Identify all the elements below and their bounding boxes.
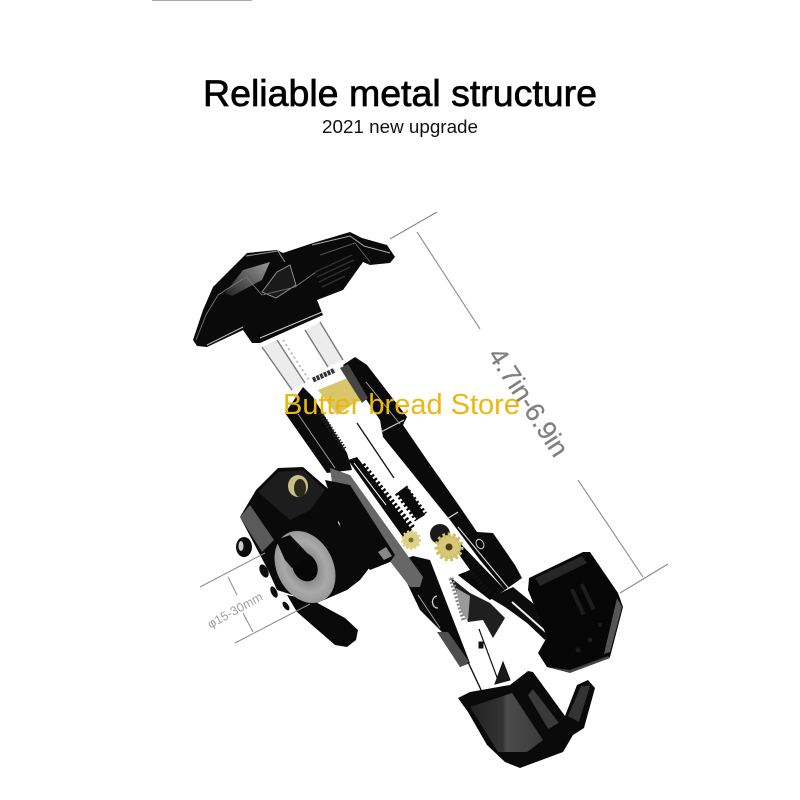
mount body <box>240 467 370 603</box>
title: Reliable metal structure <box>203 72 597 114</box>
left upper arm <box>285 387 352 473</box>
grey bar <box>330 468 423 587</box>
dimension label: width range: 4.7in-6.9in <box>482 342 575 462</box>
dimension label: diameter: φ15-30mm <box>205 590 265 631</box>
top edge rule <box>152 0 252 1</box>
clamp disc <box>262 520 348 614</box>
yellow slider block <box>313 364 368 415</box>
right upper arm <box>343 357 522 592</box>
lower left arm <box>396 556 470 667</box>
spring <box>320 413 345 450</box>
dimension: bar diameter <box>200 553 310 643</box>
thin lower rods <box>468 629 510 692</box>
lever <box>287 595 358 647</box>
racks <box>348 457 425 537</box>
bottom clamp <box>458 671 595 768</box>
mount connector <box>325 480 395 570</box>
large gear <box>423 520 470 578</box>
subtitle: 2021 new upgrade <box>322 117 478 137</box>
bottom right clamp <box>528 552 623 673</box>
handlebar mount <box>236 467 395 647</box>
lower tooth block <box>445 540 505 600</box>
lower rack and pawl <box>450 570 505 638</box>
connector arm <box>490 587 557 640</box>
sliding rods <box>262 322 343 390</box>
watermark: Butter bread Store <box>283 389 520 421</box>
loose bolts <box>236 537 252 557</box>
brass bolt <box>288 475 308 497</box>
product: exploded phone holder <box>193 232 623 768</box>
thin centre rod <box>357 423 394 478</box>
dimension: phone width range <box>390 212 668 593</box>
small gear <box>402 532 420 548</box>
top clamp <box>193 232 395 347</box>
